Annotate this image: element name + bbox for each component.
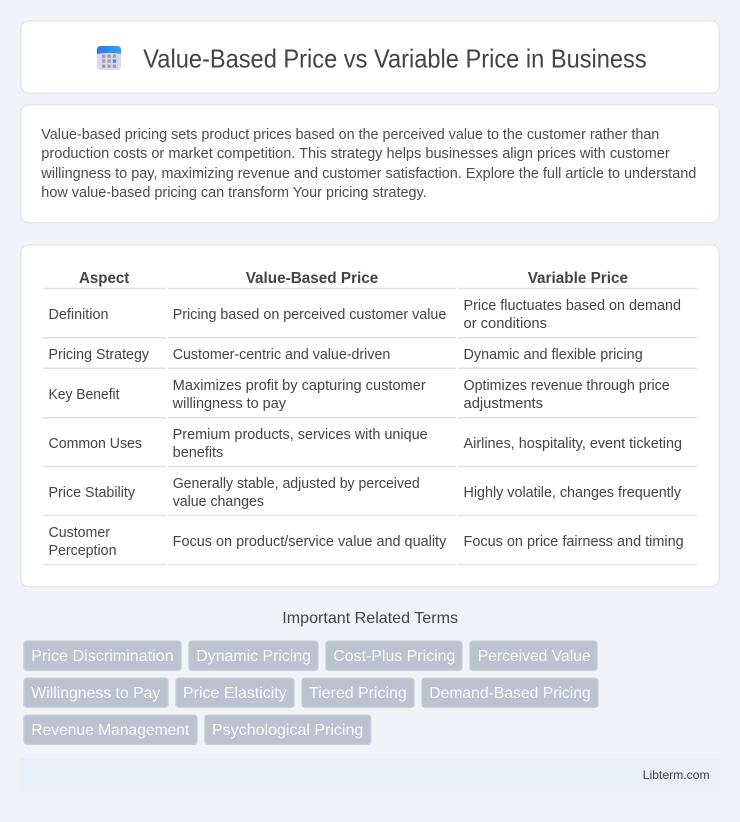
row: common uses: benefits [173, 445, 223, 461]
row: customer perception: Focus on product/service value and quality [173, 534, 447, 550]
row: common uses: Airlines, hospitality, event ticketing [464, 436, 682, 452]
table header row: Aspect [79, 270, 129, 287]
row: customer perception: Focus on price fairness and timing [464, 534, 684, 550]
icon: calendar [97, 46, 121, 70]
row: key benefit [48, 378, 670, 412]
row: pricing strategy: Dynamic and flexible pricing [464, 347, 643, 363]
tag: tiered pricing [302, 678, 414, 708]
tag: perceived value: Perceived Value [478, 648, 591, 665]
tag: revenue management [24, 715, 197, 744]
tag: price elasticity [176, 678, 294, 708]
tag: revenue management: Revenue Management [31, 722, 190, 739]
tag: demand-based pricing: Demand-Based Pricing [429, 685, 591, 702]
row: common uses [48, 427, 682, 461]
row: key benefit: adjustments [464, 396, 543, 412]
row: price stability: Generally stable, adjusted by perceived [173, 476, 420, 492]
row: customer perception [48, 525, 684, 559]
row: price stability [48, 476, 682, 510]
row: price stability: value changes [173, 494, 264, 510]
related term tags [24, 641, 598, 744]
row: key benefit: willingness to pay [172, 396, 287, 412]
footer credit: Libterm.com [643, 768, 710, 782]
tag: willingness to pay: Willingness to Pay [31, 685, 160, 702]
tag: price discrimination [24, 641, 181, 670]
tag: psychological pricing: Psychological Pricing [212, 722, 363, 739]
tag: tiered pricing: Tiered Pricing [309, 685, 407, 702]
row: pricing strategy: Pricing Strategy [48, 347, 150, 363]
row: pricing strategy: Customer-centric and value-driven [173, 347, 390, 363]
row: definition: Pricing based on perceived customer value [173, 307, 446, 323]
row: definition: Definition [48, 307, 108, 323]
table header row: Value-Based Price [246, 270, 379, 287]
intro text: Value-based pricing sets product prices based on the perceived value to the customer rather than [41, 127, 659, 143]
tag: demand-based pricing [422, 678, 598, 708]
table header row: Variable Price [528, 270, 628, 287]
footer bar [20, 758, 720, 792]
row: key benefit: Key Benefit [48, 387, 120, 403]
tag: dynamic pricing: Dynamic Pricing [196, 648, 311, 665]
row: customer perception: Perception [48, 543, 116, 559]
tag: dynamic pricing [189, 641, 318, 670]
tag: price discrimination: Price Discrimination [31, 648, 174, 665]
intro text: how value-based pricing can transform Your pricing strategy. [41, 185, 427, 201]
row: pricing strategy [48, 347, 643, 363]
row: price stability: Highly volatile, changes frequently [464, 485, 682, 501]
row: definition [48, 298, 681, 332]
tag: psychological pricing [205, 715, 371, 744]
row: key benefit: Optimizes revenue through price [464, 378, 670, 394]
tag: cost-plus pricing: Cost-Plus Pricing [333, 648, 455, 665]
intro text [40, 127, 696, 201]
table header row [79, 270, 628, 287]
tag: cost-plus pricing [326, 641, 462, 670]
intro text: production costs or market competition. This strategy helps businesses align prices with customer [41, 146, 670, 162]
intro text: willingness to pay, maximizing revenue and customer satisfaction. Explore the full article to understand [40, 166, 696, 182]
row: definition: Price fluctuates based on demand [464, 298, 681, 314]
row: common uses: Common Uses [48, 436, 142, 452]
panel: introduction [21, 105, 719, 223]
tag: price elasticity: Price Elasticity [183, 685, 287, 702]
row: customer perception: Customer [48, 525, 110, 541]
tag: perceived value [470, 641, 597, 670]
title: Value-Based Price vs Variable Price in Business [143, 46, 647, 74]
row: common uses: Premium products, services with unique [173, 427, 428, 443]
tag: willingness to pay [24, 678, 168, 708]
row: key benefit: Maximizes profit by capturing customer [173, 378, 426, 394]
row: price stability: Price Stability [48, 485, 136, 501]
panel: comparison table [21, 245, 719, 587]
row: definition: or conditions [464, 316, 547, 332]
panel: title header [21, 21, 719, 93]
heading: important related terms: Important Related Terms [282, 610, 458, 627]
